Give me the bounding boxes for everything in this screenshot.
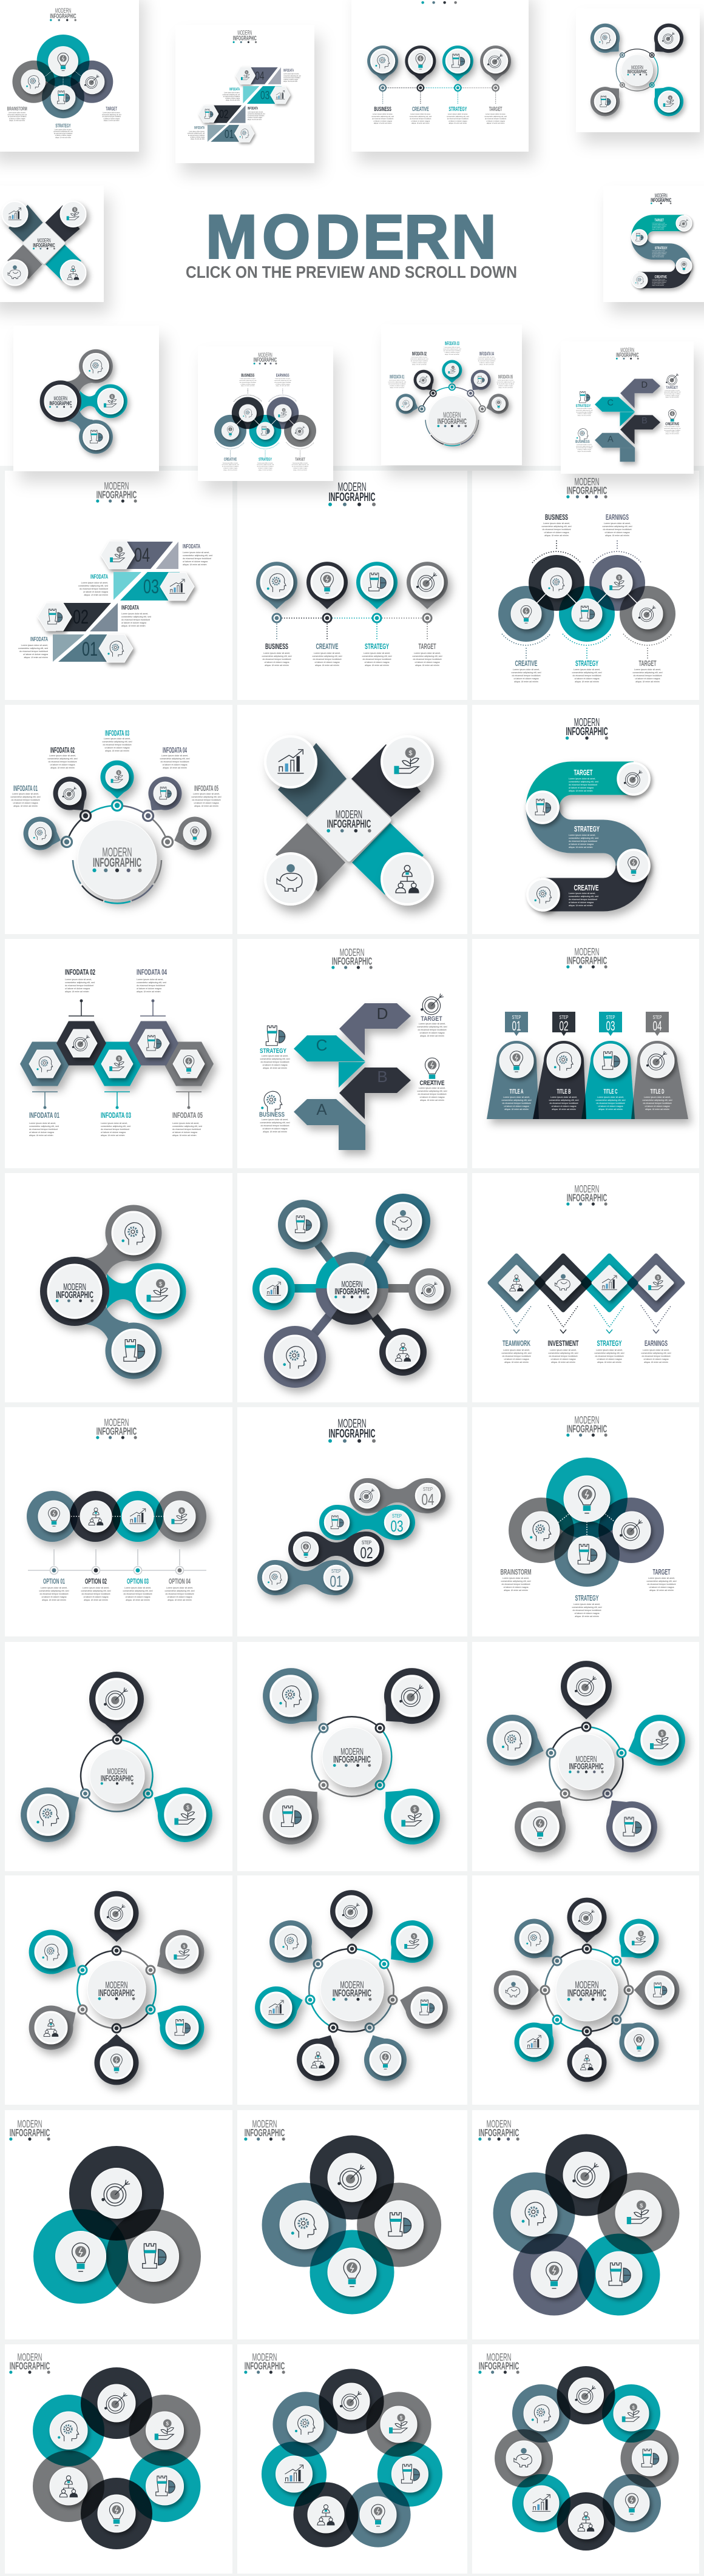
step numbers: STEP xyxy=(423,1487,433,1492)
ring xyxy=(312,1717,391,1797)
pin icons xyxy=(494,1668,678,1845)
labels xyxy=(500,1567,676,1618)
preview card: folded arrows xyxy=(561,341,694,474)
title xyxy=(96,480,137,503)
step numbers: 02 xyxy=(360,1544,373,1562)
step flags xyxy=(505,1012,669,1036)
title xyxy=(328,481,376,506)
ribbon text xyxy=(569,768,600,907)
stems xyxy=(32,1000,201,1109)
preview card: overlapping circles xyxy=(198,346,333,481)
panel: seven circle ring xyxy=(237,2344,467,2574)
diamonds xyxy=(490,1256,683,1310)
labels: INFODATA 05 xyxy=(172,1111,203,1120)
step flags: STEP xyxy=(606,1015,615,1020)
center diamond xyxy=(309,781,389,859)
panel: overlapping circles five items xyxy=(472,471,699,700)
arcs and nodes xyxy=(62,801,172,903)
disc icons xyxy=(56,2168,178,2282)
arrow letters: C xyxy=(316,1036,327,1054)
panel: numbered ribbon steps xyxy=(5,471,232,700)
overlapping circles xyxy=(498,555,675,642)
folded arrows xyxy=(294,1003,411,1150)
circle icons xyxy=(511,568,663,629)
tombstone columns xyxy=(487,1041,688,1119)
disc icons xyxy=(38,1501,195,1532)
labels xyxy=(39,1577,194,1601)
ring xyxy=(547,1723,626,1800)
step 02 ribbon: 02 xyxy=(73,606,89,628)
labels xyxy=(259,1015,447,1133)
connecting necks and discs xyxy=(40,1205,186,1379)
X bands xyxy=(276,743,424,895)
corner discs xyxy=(265,736,433,904)
labels xyxy=(262,642,442,667)
pins xyxy=(251,1656,452,1856)
step 03 ribbon: 03 xyxy=(143,576,159,597)
pin icons xyxy=(28,1679,205,1835)
step numbers: 01 xyxy=(330,1572,342,1590)
labels: INFODATA 02 xyxy=(50,745,75,755)
dumbbells xyxy=(257,1478,445,1595)
overlapping circles xyxy=(262,2135,441,2315)
step numbers: STEP xyxy=(392,1513,402,1519)
labels: EARNINGS xyxy=(606,513,629,522)
labels: INFODATA 01 xyxy=(29,1111,59,1120)
labels: CREATIVE xyxy=(515,659,538,668)
title xyxy=(244,2351,285,2374)
step 02 ribbon: INFODATA xyxy=(121,605,139,611)
spokes xyxy=(274,1221,430,1357)
labels: OPTION 03 xyxy=(127,1577,149,1586)
preview card: pin timeline xyxy=(351,0,529,152)
column text: TITLE C xyxy=(603,1088,618,1095)
disc icons xyxy=(276,2383,428,2533)
panel: pin timeline xyxy=(237,471,467,700)
labels: TARGET xyxy=(653,1567,671,1576)
column text xyxy=(502,1088,672,1111)
panel: X diagram xyxy=(237,705,467,934)
step numbers: STEP xyxy=(362,1540,371,1545)
step 04 ribbon xyxy=(101,541,212,569)
hexagons xyxy=(20,1021,214,1086)
center disc xyxy=(90,1749,144,1803)
column text: TITLE A xyxy=(510,1088,524,1095)
overlapping circles xyxy=(495,2366,679,2551)
title xyxy=(331,946,373,969)
ribbon text: STRATEGY xyxy=(574,824,600,833)
ribbon text: TARGET xyxy=(574,768,593,777)
step 03 ribbon: INFODATA xyxy=(90,574,108,580)
panel: arc with five pins xyxy=(5,705,232,934)
labels: OPTION 04 xyxy=(169,1577,191,1586)
preview card: S ribbon xyxy=(603,186,704,302)
step numbers: 04 xyxy=(421,1490,435,1508)
panel: ring with five pins xyxy=(472,1642,699,1871)
disc icons xyxy=(506,2378,668,2539)
labels: STRATEGY xyxy=(575,659,598,668)
satellite discs xyxy=(252,1194,451,1388)
overlapping circles xyxy=(493,2134,680,2316)
pins xyxy=(256,562,448,609)
step 01 ribbon: INFODATA xyxy=(30,636,48,643)
title xyxy=(9,2351,50,2374)
labels xyxy=(29,967,203,1137)
center disc xyxy=(556,1959,618,2021)
panel: dumbbell steps xyxy=(237,1407,467,1636)
labels: STRATEGY xyxy=(575,1593,599,1602)
title xyxy=(96,1416,137,1439)
center disc xyxy=(322,1727,382,1787)
labels: CREATIVE xyxy=(316,642,339,651)
title xyxy=(478,2118,520,2141)
panel: four big overlapping circles xyxy=(237,2110,467,2339)
overlapping circles xyxy=(262,2369,442,2547)
pin icons xyxy=(261,567,443,598)
labels xyxy=(502,1339,671,1364)
labels: INFODATA 05 xyxy=(194,784,218,793)
center disc xyxy=(78,820,157,899)
preview card: arc pins xyxy=(381,325,522,465)
subheading: CLICK ON THE PREVIEW AND SCROLL DOWN xyxy=(186,263,517,281)
labels: OPTION 02 xyxy=(85,1577,107,1586)
step flags: STEP xyxy=(512,1015,521,1020)
side icons xyxy=(261,994,444,1112)
overlapping circles xyxy=(33,2367,200,2549)
preview card: metaball discs xyxy=(13,326,159,471)
title xyxy=(478,2351,520,2374)
title xyxy=(566,1414,608,1437)
dotted chevrons xyxy=(501,1305,671,1333)
step flags: STEP xyxy=(653,1015,662,1020)
step 01 ribbon: 01 xyxy=(82,638,98,660)
labels: STRATEGY xyxy=(365,642,389,651)
panel: options timeline xyxy=(5,1407,232,1636)
labels: TARGET xyxy=(419,642,436,651)
disc icons xyxy=(522,1476,651,1573)
disc icons xyxy=(280,2153,424,2296)
title xyxy=(328,1417,376,1443)
panel: hexagon chain xyxy=(5,939,232,1168)
ring xyxy=(306,1945,397,2032)
column text: TITLE D xyxy=(651,1088,665,1095)
labels: INFODATA 03 xyxy=(105,728,129,738)
dumbbell discs xyxy=(263,1484,440,1590)
column text: TITLE B xyxy=(557,1088,571,1095)
arrow letters: D xyxy=(377,1004,388,1023)
disc icons xyxy=(511,2152,662,2298)
panel: ring with seven pins xyxy=(237,1875,467,2105)
arrow letters xyxy=(316,1004,388,1118)
panel: S ribbon xyxy=(472,705,699,934)
center disc xyxy=(320,1958,384,2021)
pin icons xyxy=(261,1896,442,2075)
overlapping discs xyxy=(27,1491,206,1542)
labels: INFODATA 04 xyxy=(163,745,187,755)
pin icons xyxy=(271,1676,432,1837)
overlapping circles xyxy=(33,2146,201,2304)
timeline xyxy=(272,614,432,639)
dotted connectors xyxy=(502,540,672,659)
labels: INVESTMENT xyxy=(547,1339,579,1348)
step flags: 04 xyxy=(653,1018,662,1034)
pins xyxy=(480,1661,692,1863)
labels: INFODATA 03 xyxy=(101,1111,131,1120)
center disc xyxy=(558,1734,614,1790)
labels: BRAINSTORM xyxy=(500,1567,532,1576)
column icons xyxy=(499,1044,674,1078)
pins xyxy=(19,761,216,856)
panel: five big overlapping circles xyxy=(472,2110,699,2339)
panel: three big overlapping circles xyxy=(5,2110,232,2339)
diamond icons xyxy=(500,1266,672,1299)
labels: TARGET xyxy=(421,1015,442,1023)
panel: folded arrows A to D xyxy=(237,939,467,1168)
title xyxy=(566,946,608,969)
main heading: MODERN xyxy=(206,203,496,272)
disc icons and title xyxy=(48,1212,179,1372)
panel: ring with eight pins xyxy=(472,1875,699,2105)
preview card: four circles xyxy=(0,0,139,152)
labels: EARNINGS xyxy=(645,1339,668,1348)
panel: ring with three pins xyxy=(5,1642,232,1871)
labels: INFODATA 01 xyxy=(13,784,38,793)
panel: hub and spokes xyxy=(237,1173,467,1402)
labels: STRATEGY xyxy=(260,1048,286,1055)
ring xyxy=(77,1946,156,2033)
panel: eight circle ring xyxy=(472,2344,699,2574)
pin icons xyxy=(29,765,206,845)
labels xyxy=(11,728,221,807)
hexagon icons xyxy=(29,1029,205,1078)
arrow letters: A xyxy=(316,1100,327,1118)
labels: INFODATA 04 xyxy=(137,967,167,977)
ring xyxy=(81,1735,152,1812)
panel: four overlapping circles with labels xyxy=(472,1407,699,1636)
disc icons xyxy=(50,2384,183,2532)
title xyxy=(566,716,608,740)
pins xyxy=(11,1672,222,1852)
labels xyxy=(512,513,662,683)
title xyxy=(9,2118,50,2141)
labels: OPTION 01 xyxy=(43,1577,65,1586)
step numbers: STEP xyxy=(331,1569,341,1574)
pins xyxy=(494,1898,679,2082)
step flags: STEP xyxy=(560,1015,568,1020)
ribbon discs xyxy=(527,763,649,910)
panel: ring with six pins xyxy=(5,1875,232,2105)
panel: four steps xyxy=(472,939,699,1168)
pins xyxy=(21,1891,212,2085)
timeline xyxy=(28,1549,206,1575)
overlapping circles xyxy=(509,1458,664,1587)
panel: six circle ring xyxy=(5,2344,232,2574)
pin icons xyxy=(35,1897,198,2079)
hub segments xyxy=(316,1252,388,1325)
step numbers xyxy=(330,1487,435,1590)
labels: STRATEGY xyxy=(597,1339,622,1348)
step numbers: 03 xyxy=(391,1517,403,1535)
step flags: 03 xyxy=(606,1018,615,1034)
pin icons xyxy=(499,1903,674,2076)
step 01 ribbon xyxy=(18,634,133,662)
title xyxy=(566,1183,608,1206)
step 03 ribbon xyxy=(78,572,194,600)
labels: TEAMWORK xyxy=(503,1339,530,1348)
labels: CREATIVE xyxy=(420,1080,444,1087)
panel: ring with four pins xyxy=(237,1642,467,1871)
disc icons and title xyxy=(260,1203,443,1378)
step 02 ribbon xyxy=(38,603,151,631)
preview card: ribbons xyxy=(175,25,314,163)
arrow letters: B xyxy=(377,1068,388,1086)
pins xyxy=(250,1890,453,2088)
labels: TARGET xyxy=(638,659,657,668)
step flags: 02 xyxy=(560,1018,568,1034)
labels: BUSINESS xyxy=(265,642,288,651)
step flags: 01 xyxy=(512,1018,521,1034)
step 04 ribbon: 04 xyxy=(134,544,150,566)
title xyxy=(244,2118,285,2141)
step 04 ribbon: INFODATA xyxy=(183,543,200,550)
labels: INFODATA 02 xyxy=(65,967,95,977)
labels: BUSINESS xyxy=(545,513,568,522)
title xyxy=(566,476,608,499)
ribbon text: CREATIVE xyxy=(574,883,599,892)
preview card: ring with four pins xyxy=(576,8,700,132)
ring xyxy=(541,1945,633,2036)
panel: diamond chain xyxy=(472,1173,699,1402)
labels: BUSINESS xyxy=(259,1111,285,1118)
center disc xyxy=(87,1960,146,2019)
S ribbon xyxy=(540,778,634,895)
panel: metaball three discs xyxy=(5,1173,232,1402)
preview card: X diagram xyxy=(0,186,104,302)
